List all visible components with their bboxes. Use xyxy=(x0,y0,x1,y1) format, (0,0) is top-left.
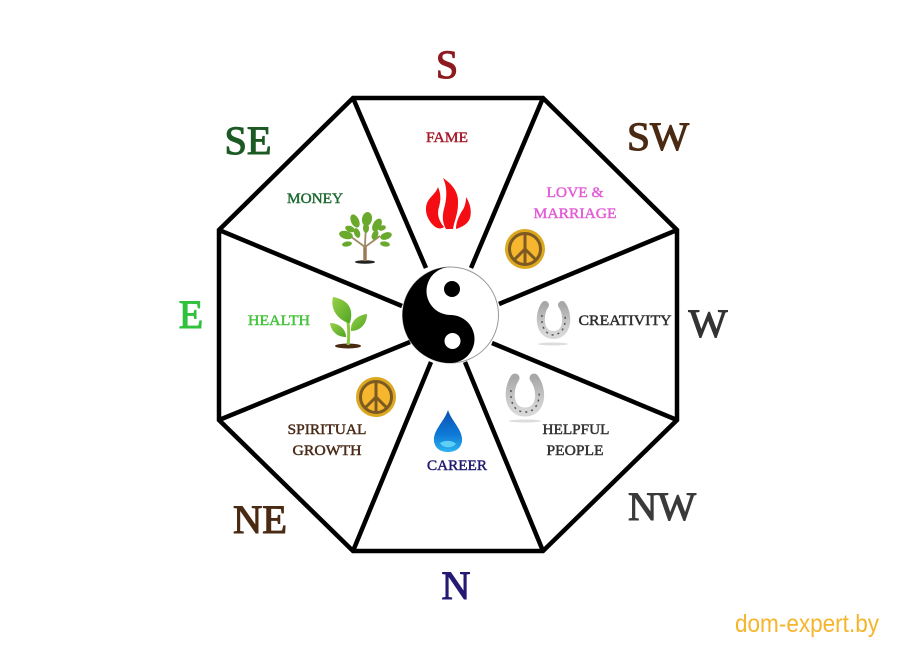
icon: flame xyxy=(426,178,471,229)
sector label: health: HEALTH xyxy=(248,313,310,329)
sector label: spiritual growth xyxy=(288,422,366,459)
yin-yang symbol xyxy=(402,267,498,363)
direction label: NE: NE xyxy=(233,497,287,542)
direction label: W: W xyxy=(688,301,728,346)
sector label: love and marriage: MARRIAGE xyxy=(534,206,616,222)
direction label: SE: SE xyxy=(224,118,272,163)
direction label: E: E xyxy=(179,292,203,337)
sector label: helpful people xyxy=(542,422,610,459)
sector label: love and marriage: LOVE & xyxy=(546,185,604,201)
icon: peace sign, love xyxy=(505,229,545,269)
sector label: helpful people: HELPFUL xyxy=(542,422,610,438)
sector label: money: MONEY xyxy=(287,191,343,207)
direction label: S: S xyxy=(436,42,458,87)
icon: horseshoe, helpful people xyxy=(509,378,541,422)
sector label: career: CAREER xyxy=(427,458,487,474)
icon: tree xyxy=(338,211,393,264)
sector label: spiritual growth: GROWTH xyxy=(292,443,362,459)
sector label: love and marriage xyxy=(534,185,616,222)
icon: peace sign, spiritual growth xyxy=(356,377,396,417)
sector label: creativity: CREATIVITY xyxy=(578,313,672,329)
sector label: helpful people: PEOPLE xyxy=(546,443,604,459)
direction label: SW: SW xyxy=(627,114,689,159)
icon: sprout xyxy=(330,297,367,348)
direction label: NW: NW xyxy=(628,484,696,529)
sector label: spiritual growth: SPIRITUAL xyxy=(288,422,366,438)
direction label: N: N xyxy=(442,563,470,608)
icon: horseshoe, creativity xyxy=(538,305,568,346)
watermark: dom-expert.by xyxy=(735,610,879,638)
octagon outline with sector spokes xyxy=(219,98,677,551)
sector label: fame: FAME xyxy=(426,130,468,146)
icon: water drop xyxy=(434,410,462,452)
